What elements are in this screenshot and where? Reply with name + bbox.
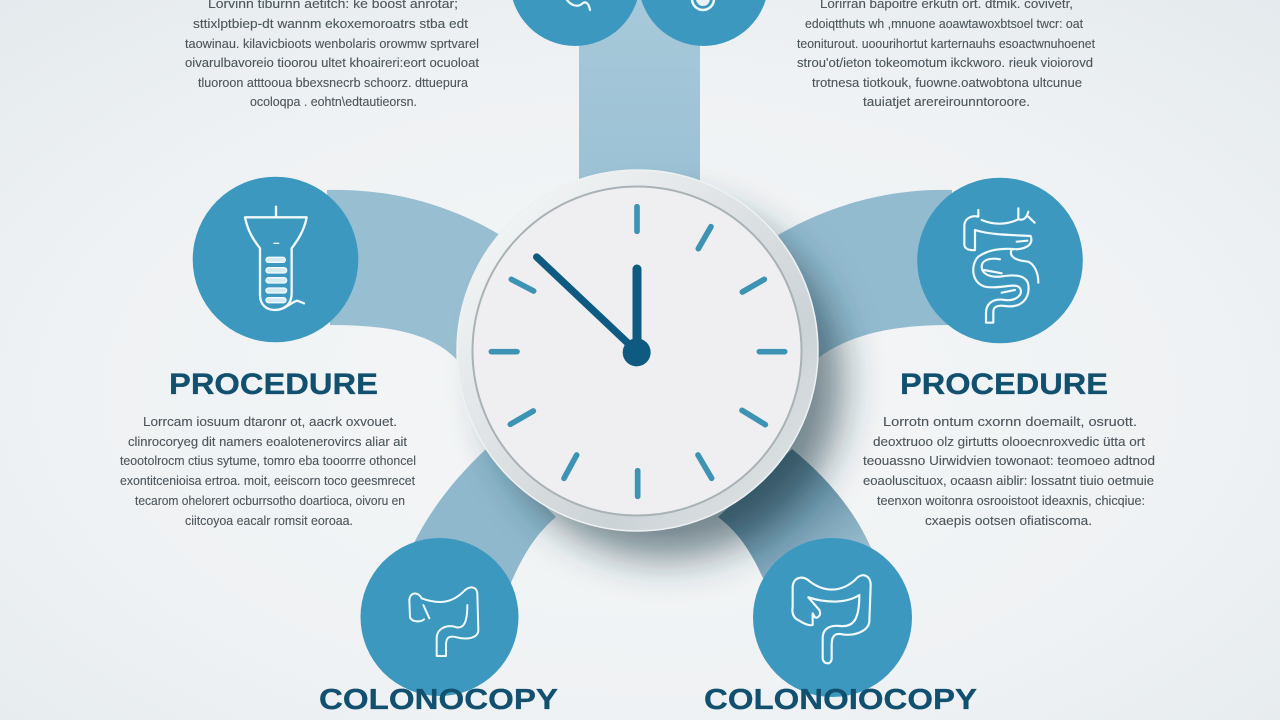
top right text block: edoiqtthuts wh ,mnuone aoawtawoxbtsoel twcr: oat <box>805 16 1083 31</box>
left middle text block: Lorrcam iosuum dtaronr ot, aacrk oxvouet. <box>143 414 397 429</box>
heading: right procedure: PROCEDURE <box>900 368 1108 401</box>
heading: right colonocopy: COLONOIOCOPY <box>704 684 977 716</box>
right middle text block <box>863 414 1155 528</box>
top left text block: tluoroon atttooua bbexsnecrb schoorz. dttuepura <box>198 75 469 90</box>
icon: colon <box>792 575 871 663</box>
top left text block: sttixlptbiep-dt wannm ekoxemoroatrs stba edt <box>193 16 468 31</box>
top right text block <box>797 0 1095 109</box>
right icon circle: intestines <box>917 178 1083 343</box>
clock rim <box>457 170 818 531</box>
left middle text block: ciitcoyoa eacalr romsit eoroaa. <box>185 513 353 528</box>
bottom left icon circle: colon <box>360 538 518 696</box>
clock hands <box>537 257 651 366</box>
connector: top band <box>579 0 700 185</box>
right middle text block: eoaoluscituox, ocaasn aiblir: lossatnt tiuio oetmuie <box>863 473 1154 488</box>
left icon circle: endoscope <box>193 177 358 342</box>
clock <box>457 170 818 531</box>
connector: lower right band <box>718 449 874 585</box>
left middle text block: tecarom ohelorert ocburrsotho doartioca, oivoru en <box>135 493 405 508</box>
left middle text block: exontitcenioisa ertroa. moit, eeiscorn toco geesmrecet <box>120 473 415 488</box>
top left text block: taowinau. kilavicbioots wenbolaris orowmw sprtvarel <box>185 36 479 51</box>
top left text block: oivarulbavoreio tioorou ultet khoaireri:eort ocuoloat <box>185 55 479 70</box>
icon: intestines <box>964 208 1038 323</box>
top right text block: teoniturout. uoourihortut karternauhs esoactwnuhoenet <box>797 36 1095 51</box>
top right text block: strou'ot/ieton tokeomotum ikckworo. rieuk vioiorovd <box>797 55 1093 70</box>
top left text block <box>185 0 479 109</box>
left middle text block: clinrocoryeg dit namers eoalotenerovircs aliar ait <box>128 434 407 449</box>
icon circle: top right <box>638 0 768 46</box>
hour ticks <box>491 207 785 496</box>
connector: lower left band <box>413 448 556 585</box>
icon circle: top left <box>510 0 640 46</box>
right middle text block: teouassno Uirwidvien towonaot: teomoeo adtnod <box>863 453 1155 468</box>
top right text block: trotnesa tiotkouk, fuowne.oatwobtona ultcunue <box>812 75 1082 90</box>
heading: left colonocopy: COLONOCOPY <box>319 684 558 716</box>
top left text block: ocoloqpa . eohtn\edtautieorsn. <box>250 94 417 109</box>
right middle text block: teenxon woitonra osrooistoot ideaxnis, chicqiue: <box>877 493 1145 508</box>
heading: left procedure: PROCEDURE <box>169 368 378 401</box>
left middle text block <box>120 414 416 528</box>
bottom right icon circle: colon <box>753 538 912 697</box>
icon: colon <box>409 587 478 656</box>
connector: right band <box>778 190 952 358</box>
right middle text block: cxaepis ootsen ofiatiscoma. <box>925 513 1092 528</box>
right middle text block: deoxtruoo olz girtutts olooecnroxvedic ütta ort <box>873 434 1145 449</box>
left middle text block: teootolrocm ctius sytume, tomro eba tooorrre othoncel <box>120 453 416 468</box>
right middle text block: Lorrotn ontum cxornn doemailt, osruott. <box>883 414 1137 429</box>
icon: endoscope <box>245 207 307 310</box>
clock face <box>472 186 802 516</box>
top circles <box>510 0 768 46</box>
top right text block: tauiatjet arereirounntoroore. <box>863 94 1030 109</box>
connector: left band <box>327 190 500 362</box>
clock shadow <box>490 206 842 558</box>
